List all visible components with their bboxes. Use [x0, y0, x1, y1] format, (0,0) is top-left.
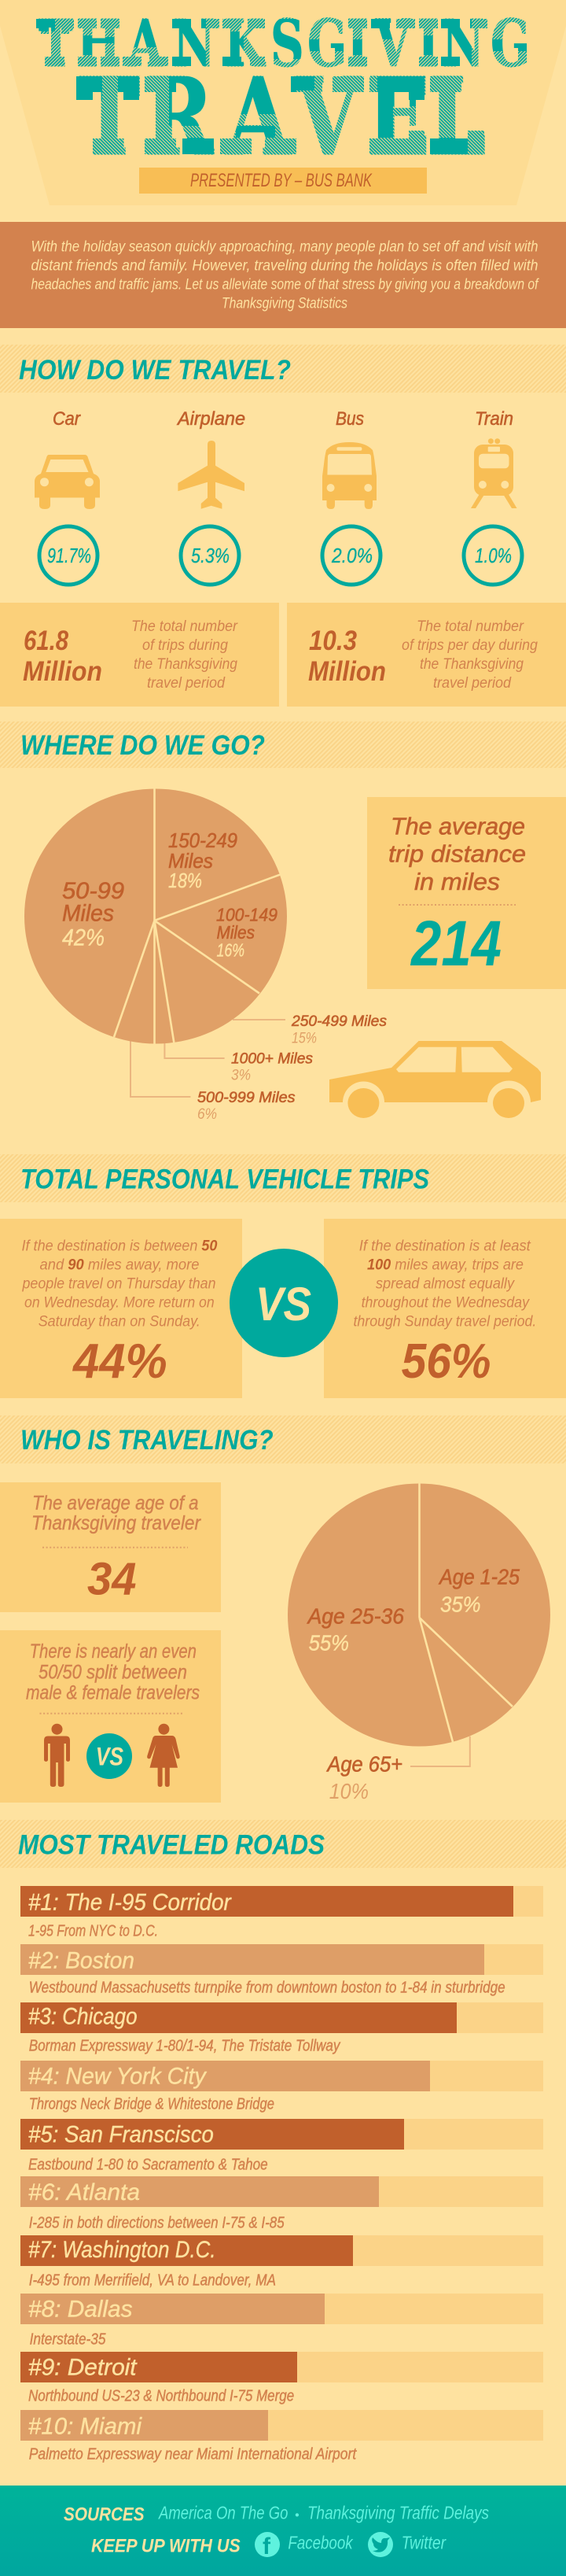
footer: [0, 2486, 566, 2576]
versus badge: VS: [255, 1278, 311, 1330]
road 7: [20, 2235, 543, 2290]
section heading: most traveled roads: MOST TRAVELED ROADS: [18, 1830, 325, 1861]
section heading: how do we travel: [0, 345, 566, 393]
section heading: where do we go: [0, 722, 566, 768]
road 4: [20, 2061, 543, 2113]
description: spread almost equally: [376, 1275, 515, 1292]
slice label: 50-99 miles: 50-99: [62, 878, 124, 904]
description: [26, 1640, 200, 1703]
road 8: Interstate-35: [30, 2331, 106, 2348]
description: travel period: [433, 675, 512, 692]
panel: shorter trips: [0, 1219, 242, 1398]
road 5: #5: San Franscisco: [28, 2122, 214, 2148]
source links: •: [295, 2509, 300, 2522]
road 9: #9: Detroit: [28, 2354, 138, 2380]
intro text: distant friends and family. However, traveling during the holidays is often filled with: [31, 258, 538, 274]
title: Thanksgiving: THANKSGIVING: [39, 6, 530, 82]
slice label: 50-99 miles: Miles: [62, 901, 114, 927]
road 6: #6: Atlanta: [28, 2179, 140, 2205]
slice label: age 25-36: 55%: [309, 1630, 349, 1655]
icon: facebook: [255, 2532, 280, 2559]
road 6: I-285 in both directions between I-75 & I-85: [29, 2215, 285, 2232]
panel: trips per day: [287, 603, 566, 707]
stat ring: train: 1.0%: [475, 544, 512, 567]
intro text: [31, 239, 539, 312]
callout: 500-999 miles: [197, 1090, 296, 1123]
road 5: [20, 2119, 543, 2173]
road 1: 1-95 From NYC to D.C.: [28, 1923, 158, 1940]
road 4: #4: New York City: [28, 2063, 208, 2089]
pie chart: trip distance: [24, 788, 388, 1123]
title slab serifs: Travel: [76, 76, 484, 154]
road 3: Borman Expressway 1-80/1-94, The Tristate Tollway: [29, 2038, 340, 2055]
heading text: trip distance: [388, 840, 526, 868]
section heading: where do we go: WHERE DO WE GO?: [20, 730, 265, 761]
presented by banner: PRESENTED BY – BUS BANK: [190, 170, 373, 191]
callout: age 65+: 10%: [329, 1779, 369, 1803]
stat ring: airplane: 5.3%: [191, 544, 230, 567]
icon: car: [35, 455, 100, 509]
description: [354, 1238, 536, 1330]
slice label: 50-99 miles: [62, 878, 124, 951]
description: 100 miles away, trips are: [367, 1257, 524, 1273]
stat: 56%: 56%: [402, 1334, 491, 1389]
road 10: #10: Miami: [28, 2413, 142, 2439]
slice label: 150-249 miles: [168, 829, 237, 892]
description: [402, 618, 538, 692]
icon: man: [44, 1724, 70, 1787]
road 3: #3: Chicago: [28, 2004, 137, 2030]
callout: 250-499 miles: 250-499 Miles: [291, 1013, 388, 1030]
stat ring: bus: 2.0%: [331, 544, 373, 567]
slice label: 100-149 miles: [216, 905, 277, 961]
road 1: [20, 1886, 543, 1940]
source links: [157, 2503, 489, 2523]
description: of trips during: [142, 637, 228, 654]
slice label: 150-249 miles: Miles: [168, 849, 213, 873]
versus badge small: [86, 1733, 132, 1779]
stat ring: airplane: [181, 526, 239, 585]
slice label: age 1-25: Age 1-25: [438, 1564, 520, 1589]
intro text: Thanksgiving Statistics: [222, 296, 347, 312]
callout: 500-999 miles: 500-999 Miles: [197, 1090, 296, 1106]
description: Saturday than on Sunday.: [39, 1313, 200, 1330]
description: The total number: [131, 618, 238, 635]
presented by banner: [139, 168, 427, 194]
source links: America On The Go: [157, 2503, 289, 2523]
callout: 500-999 miles: 6%: [197, 1106, 217, 1123]
label: airplane: Airplane: [176, 408, 245, 430]
description: people travel on Thursday than: [22, 1275, 216, 1292]
pie chart: age groups: [288, 1483, 550, 1803]
description: If the destination is between 50: [22, 1238, 218, 1254]
stat: 10.3 million: 10.3: [309, 626, 357, 656]
slice label: age 25-36: [307, 1604, 404, 1655]
road 6: [20, 2176, 543, 2232]
description: throughout the Wednesday: [362, 1294, 530, 1311]
slice label: age 25-36: Age 25-36: [307, 1604, 404, 1628]
panel: longer trips: [324, 1219, 566, 1398]
icon: woman: [147, 1724, 180, 1787]
slice label: 100-149 miles: Miles: [217, 922, 255, 943]
description: through Sunday travel period.: [354, 1313, 536, 1330]
sources heading: SOURCES: [64, 2504, 145, 2525]
road 8: #8: Dallas: [28, 2296, 132, 2322]
icon: large car: [329, 1041, 541, 1118]
label: train: Train: [475, 408, 513, 430]
panel: average age: [0, 1482, 221, 1612]
stat: 61.8 million: Million: [23, 656, 102, 687]
stat: 10.3 million: Million: [308, 656, 386, 687]
heading text: [388, 813, 526, 895]
callout: 1000+ miles: 1000+ Miles: [231, 1051, 313, 1068]
road 8: [20, 2294, 543, 2348]
road 2: [20, 1944, 543, 1996]
panel: transport modes: [35, 408, 522, 585]
description: male & female travelers: [26, 1681, 200, 1703]
callout: 250-499 miles: [291, 1013, 388, 1047]
heading text: The average: [391, 813, 525, 840]
slice label: age 1-25: 35%: [440, 1592, 481, 1616]
versus badge: [230, 1249, 338, 1357]
callout: 1000+ miles: [231, 1051, 313, 1084]
description: If the destination is at least: [359, 1238, 531, 1254]
description: There is nearly an even: [30, 1640, 197, 1663]
road 1: #1: The I-95 Corridor: [28, 1889, 232, 1915]
road 5: Eastbound 1-80 to Sacramento & Tahoe: [28, 2156, 268, 2173]
road 4: Throngs Neck Bridge & Whitestone Bridge: [29, 2096, 274, 2113]
road 7: I-495 from Merrifield, VA to Landover, MA: [29, 2272, 276, 2290]
twitter label: Twitter: [402, 2532, 447, 2552]
description: on Wednesday. More return on: [24, 1294, 215, 1311]
description: travel period: [147, 675, 226, 692]
stat: 214: 214: [410, 908, 502, 980]
description: [131, 618, 238, 692]
keep up heading: KEEP UP WITH US: [91, 2535, 241, 2556]
slice label: 50-99 miles: 42%: [62, 925, 105, 951]
stat: 61.8 million: [23, 626, 102, 687]
stat: 10.3 million: [308, 626, 386, 687]
source links: Thanksgiving Traffic Delays: [307, 2503, 489, 2523]
slice label: 150-249 miles: 150-249: [168, 829, 237, 852]
description: The total number: [417, 618, 524, 635]
heading text: in miles: [414, 868, 500, 895]
icon: facebook: f: [263, 2534, 271, 2559]
bar chart: most traveled roads: [20, 1886, 543, 2463]
stat ring: car: 91.7%: [47, 544, 91, 567]
description: the Thanksgiving: [420, 656, 524, 673]
stat: 61.8 million: 61.8: [24, 626, 68, 656]
icon: airplane: [178, 441, 244, 509]
panel: gender split: [0, 1630, 221, 1803]
description: The average age of a: [32, 1492, 199, 1514]
road 10: [20, 2410, 543, 2463]
stat ring: train: [464, 526, 522, 585]
description: [31, 1492, 202, 1534]
stat: 44%: 44%: [72, 1334, 167, 1389]
icon: twitter: [368, 2532, 393, 2557]
section heading: who is traveling: [0, 1415, 566, 1463]
road 9: [20, 2352, 543, 2404]
facebook label: Facebook: [288, 2532, 354, 2552]
section heading: who is traveling: WHO IS TRAVELING?: [20, 1425, 274, 1456]
road 3: [20, 2002, 543, 2055]
description: and 90 miles away, more: [39, 1257, 200, 1273]
label: car: Car: [53, 408, 81, 430]
callout: age 65+: [326, 1752, 402, 1803]
versus badge small: VS: [96, 1742, 124, 1770]
description: [22, 1238, 218, 1330]
callout: age 65+: Age 65+: [326, 1752, 402, 1777]
description: Thanksgiving traveler: [31, 1512, 202, 1534]
callout: 1000+ miles: 3%: [231, 1068, 251, 1084]
description: 50/50 split between: [39, 1661, 187, 1683]
intro panel: [0, 222, 566, 328]
panel: average trip distance: [367, 797, 566, 989]
slice label: 100-149 miles: 16%: [217, 940, 244, 961]
stat ring: bus: [322, 526, 380, 585]
road 9: Northbound US-23 & Northbound I-75 Merge: [28, 2387, 294, 2404]
title slab serifs: Thanksgiving: [36, 19, 487, 66]
title: Travel: TRAVEL: [79, 54, 487, 179]
road 7: #7: Washington D.C.: [28, 2237, 216, 2263]
road 2: #2: Boston: [28, 1947, 134, 1973]
icon: bus: [322, 442, 377, 509]
road 10: Palmetto Expressway near Miami International Airport: [29, 2446, 357, 2463]
slice label: 100-149 miles: 100-149: [216, 905, 277, 925]
icon: train: [471, 438, 517, 508]
leader line: [410, 1736, 470, 1766]
callout: 250-499 miles: 15%: [292, 1031, 317, 1047]
section heading: how do we travel: HOW DO WE TRAVEL?: [19, 355, 291, 386]
section heading: total personal vehicle trips: TOTAL PERSONAL VEHICLE TRIPS: [20, 1164, 429, 1195]
description: of trips per day during: [402, 637, 538, 654]
label: bus: Bus: [336, 408, 364, 430]
section heading: total personal vehicle trips: [0, 1154, 566, 1202]
description: the Thanksgiving: [134, 656, 237, 673]
panel: total trips: [0, 603, 279, 707]
section heading: most traveled roads: [0, 1820, 566, 1868]
header: [0, 0, 566, 205]
slice label: age 1-25: [438, 1564, 520, 1616]
stat ring: car: [39, 526, 97, 585]
leader lines: [130, 1020, 285, 1097]
stat: 34: 34: [87, 1554, 137, 1605]
header trapezoid: [0, 0, 566, 205]
slice label: 150-249 miles: 18%: [168, 869, 202, 892]
